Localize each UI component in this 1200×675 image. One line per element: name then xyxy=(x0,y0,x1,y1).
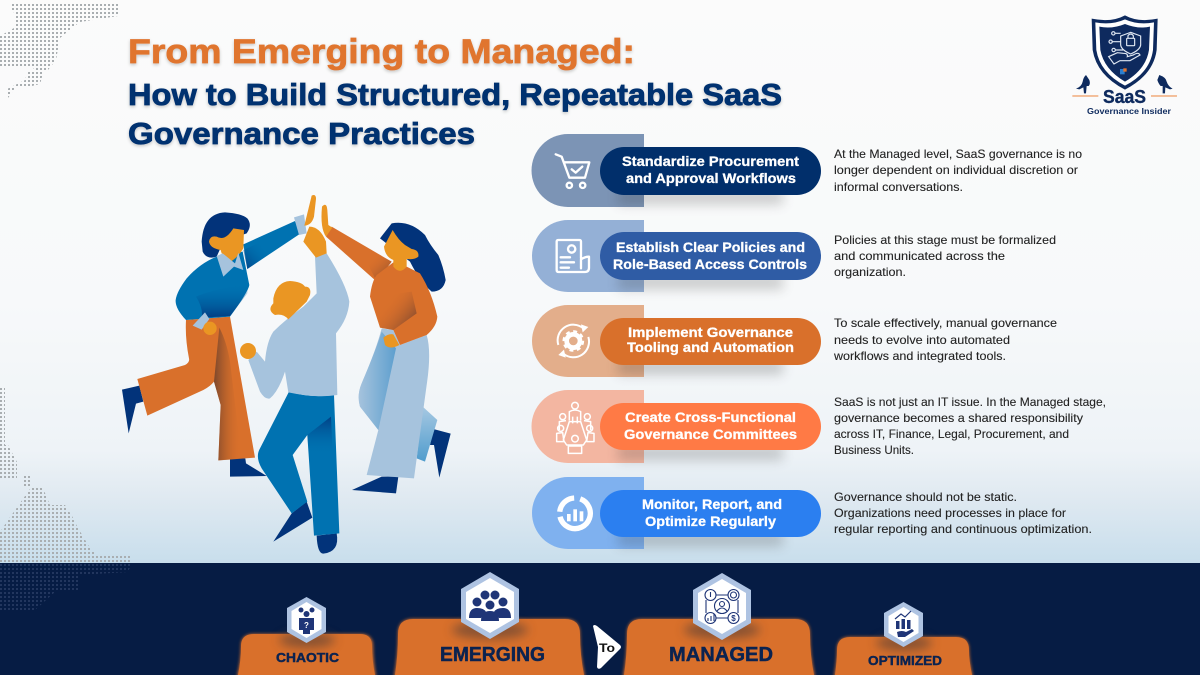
icon: policy document xyxy=(557,240,589,272)
text: step 1 description: At the Managed level, SaaS governance is no xyxy=(834,147,1082,161)
icon: hexagon management cycle xyxy=(693,573,751,640)
panel: step 2 policies and access controls: Establish Clear Policies and xyxy=(616,239,805,255)
text: step 1 description: longer dependent on individual discretion or xyxy=(834,163,1078,177)
illustration: three people high-fiving xyxy=(122,195,451,554)
figure: center person xyxy=(240,227,349,554)
logo: SaaS Governance Insider: Governance Insider xyxy=(1087,106,1172,116)
panel: step 1 standardize procurement xyxy=(532,134,821,207)
text: step 3 description: workflows and integrated tools. xyxy=(833,349,1006,363)
panel: step 1 standardize procurement: Standardize Procurement xyxy=(622,153,799,169)
panel: step 3 tooling and automation xyxy=(532,305,821,377)
maturity stage: chaotic: CHAOTIC xyxy=(276,650,340,665)
panel: step 5 monitor and optimize: Monitor, Report, and xyxy=(642,496,782,512)
maturity stage: chaotic xyxy=(237,597,376,675)
title: How to Build Structured, Repeatable SaaS xyxy=(128,78,782,112)
logo: SaaS Governance Insider xyxy=(1072,15,1177,116)
panel: step 4 cross-functional committees: Create Cross-Functional xyxy=(625,409,796,425)
panel: step 5 monitor and optimize: Optimize Regularly xyxy=(645,513,776,529)
text: step 2 description: and communicated across the xyxy=(834,249,1005,263)
text: step 1 description xyxy=(834,147,1082,194)
icon: gear with cycle arrows xyxy=(558,324,589,358)
icon: hexagon unknown person: ? xyxy=(304,621,309,630)
text: step 2 description: organization. xyxy=(834,265,906,279)
icon: committee around table xyxy=(557,402,594,453)
icon: hexagon team xyxy=(461,572,519,639)
text: step 4 description: SaaS is not just an IT issue. In the Managed stage, xyxy=(834,395,1106,409)
panel: step 5 monitor and optimize xyxy=(532,477,821,549)
panel: step 4 cross-functional committees: Governance Committees xyxy=(624,426,797,442)
panel: step 3 tooling and automation: Implement Governance xyxy=(628,324,793,340)
text: step 2 description: Policies at this stage must be formalized xyxy=(834,233,1056,247)
text: step 5 description xyxy=(834,490,1092,536)
figure: left woman xyxy=(122,195,316,477)
maturity stage: optimized: OPTIMIZED xyxy=(868,653,942,668)
icon: shopping cart xyxy=(556,154,589,188)
text: step 4 description: across IT, Finance, Legal, Procurement, and xyxy=(834,427,1069,441)
maturity stage: managed: MANAGED xyxy=(669,644,773,666)
maturity stage: emerging xyxy=(394,572,585,675)
panel: step 2 policies and access controls xyxy=(532,220,821,292)
text: step 4 description: Business Units. xyxy=(834,443,914,457)
text: step 4 description: governance becomes a shared responsibility xyxy=(834,411,1083,425)
icon: ring chart with bars xyxy=(555,494,595,533)
text: step 5 description: regular reporting and continuous optimization. xyxy=(834,522,1092,536)
text: step 4 description xyxy=(834,395,1106,457)
arrow: To: To xyxy=(599,641,615,655)
maturity stage: optimized xyxy=(834,602,973,675)
title xyxy=(128,33,782,151)
text: step 3 description: needs to evolve into automated xyxy=(834,333,1010,347)
panel: step 3 tooling and automation: Tooling and Automation xyxy=(627,339,794,355)
text: step 5 description: Organizations need processes in place for xyxy=(834,506,1066,520)
title: From Emerging to Managed: xyxy=(128,33,635,71)
icon: hexagon growth chart xyxy=(884,602,923,647)
text: step 2 description xyxy=(834,233,1056,279)
arrow: To xyxy=(593,625,621,669)
text: step 3 description xyxy=(833,316,1057,363)
text: step 3 description: To scale effectively, manual governance xyxy=(834,316,1057,330)
title: Governance Practices xyxy=(128,117,475,151)
panel: step 4 cross-functional committees xyxy=(532,390,821,463)
maturity stage: managed xyxy=(623,573,815,675)
figure: right woman xyxy=(321,205,451,493)
logo: SaaS Governance Insider: SaaS xyxy=(1103,87,1146,107)
maturity stage: emerging: EMERGING xyxy=(440,644,545,666)
panel: step 2 policies and access controls: Role-Based Access Controls xyxy=(613,256,807,272)
text: step 5 description: Governance should not be static. xyxy=(834,490,1017,504)
panel: step 1 standardize procurement: and Approval Workflows xyxy=(626,170,796,186)
text: step 1 description: informal conversations. xyxy=(834,180,963,194)
icon: hexagon management cycle: $ xyxy=(731,614,736,623)
